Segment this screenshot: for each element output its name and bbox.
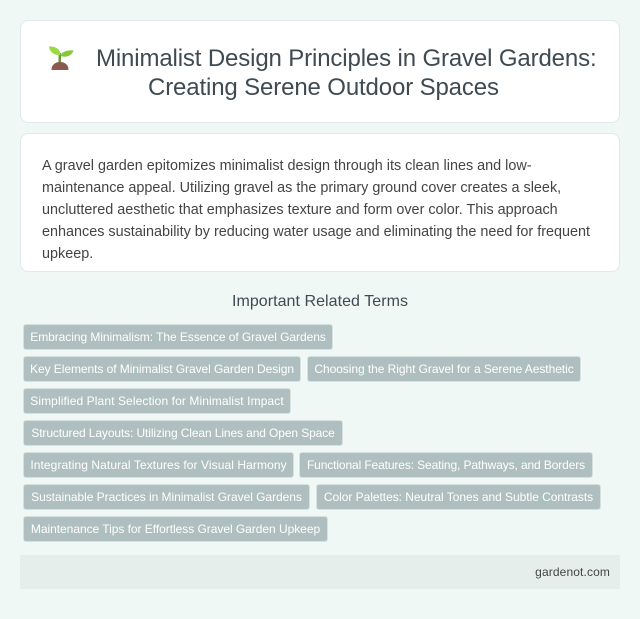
- footer source text: gardenot.com: [535, 565, 610, 579]
- tag: [299, 452, 593, 478]
- tag: Simplified Plant Selection for Minimalist Impact: [30, 394, 284, 408]
- tag: Functional Features: Seating, Pathways, and Borders: [307, 458, 585, 472]
- related terms tags: [23, 324, 601, 542]
- tag: Integrating Natural Textures for Visual Harmony: [30, 458, 287, 472]
- tag: [23, 484, 310, 510]
- intro paragraph: A gravel garden epitomizes minimalist design through its clean lines and low-: [42, 158, 532, 174]
- tag: Embracing Minimalism: The Essence of Gravel Gardens: [30, 330, 326, 344]
- tag: [23, 452, 294, 478]
- tag: [23, 420, 343, 446]
- tag: Structured Layouts: Utilizing Clean Lines and Open Space: [31, 426, 335, 440]
- intro paragraph: [42, 158, 590, 262]
- footer bar: [20, 555, 620, 589]
- title: Creating Serene Outdoor Spaces: [148, 74, 499, 101]
- intro text panel: [20, 133, 620, 272]
- tag: [316, 484, 601, 510]
- tag: Key Elements of Minimalist Gravel Garden Design: [30, 362, 294, 376]
- tag: [23, 516, 328, 542]
- title: [96, 45, 597, 101]
- header panel: [20, 20, 620, 123]
- related terms heading: Important Related Terms: [232, 293, 408, 310]
- tag: Maintenance Tips for Effortless Gravel Garden Upkeep: [31, 522, 320, 536]
- tag: [23, 388, 291, 414]
- tag: [23, 324, 333, 350]
- intro paragraph: maintenance appeal. Utilizing gravel as the primary ground cover creates a sleek,: [42, 180, 561, 196]
- intro paragraph: uncluttered aesthetic that emphasizes texture and form over color. This approach: [42, 202, 558, 218]
- icon: seedling: [49, 46, 74, 70]
- tag: Sustainable Practices in Minimalist Gravel Gardens: [31, 490, 302, 504]
- tag: [307, 356, 581, 382]
- intro paragraph: enhances sustainability by reducing water usage and eliminating the need for frequent: [42, 224, 590, 240]
- tag: [23, 356, 301, 382]
- tag: Color Palettes: Neutral Tones and Subtle Contrasts: [324, 490, 593, 504]
- intro paragraph: upkeep.: [42, 246, 93, 262]
- tag: Choosing the Right Gravel for a Serene Aesthetic: [314, 362, 574, 376]
- title: Minimalist Design Principles in Gravel Gardens:: [96, 45, 597, 72]
